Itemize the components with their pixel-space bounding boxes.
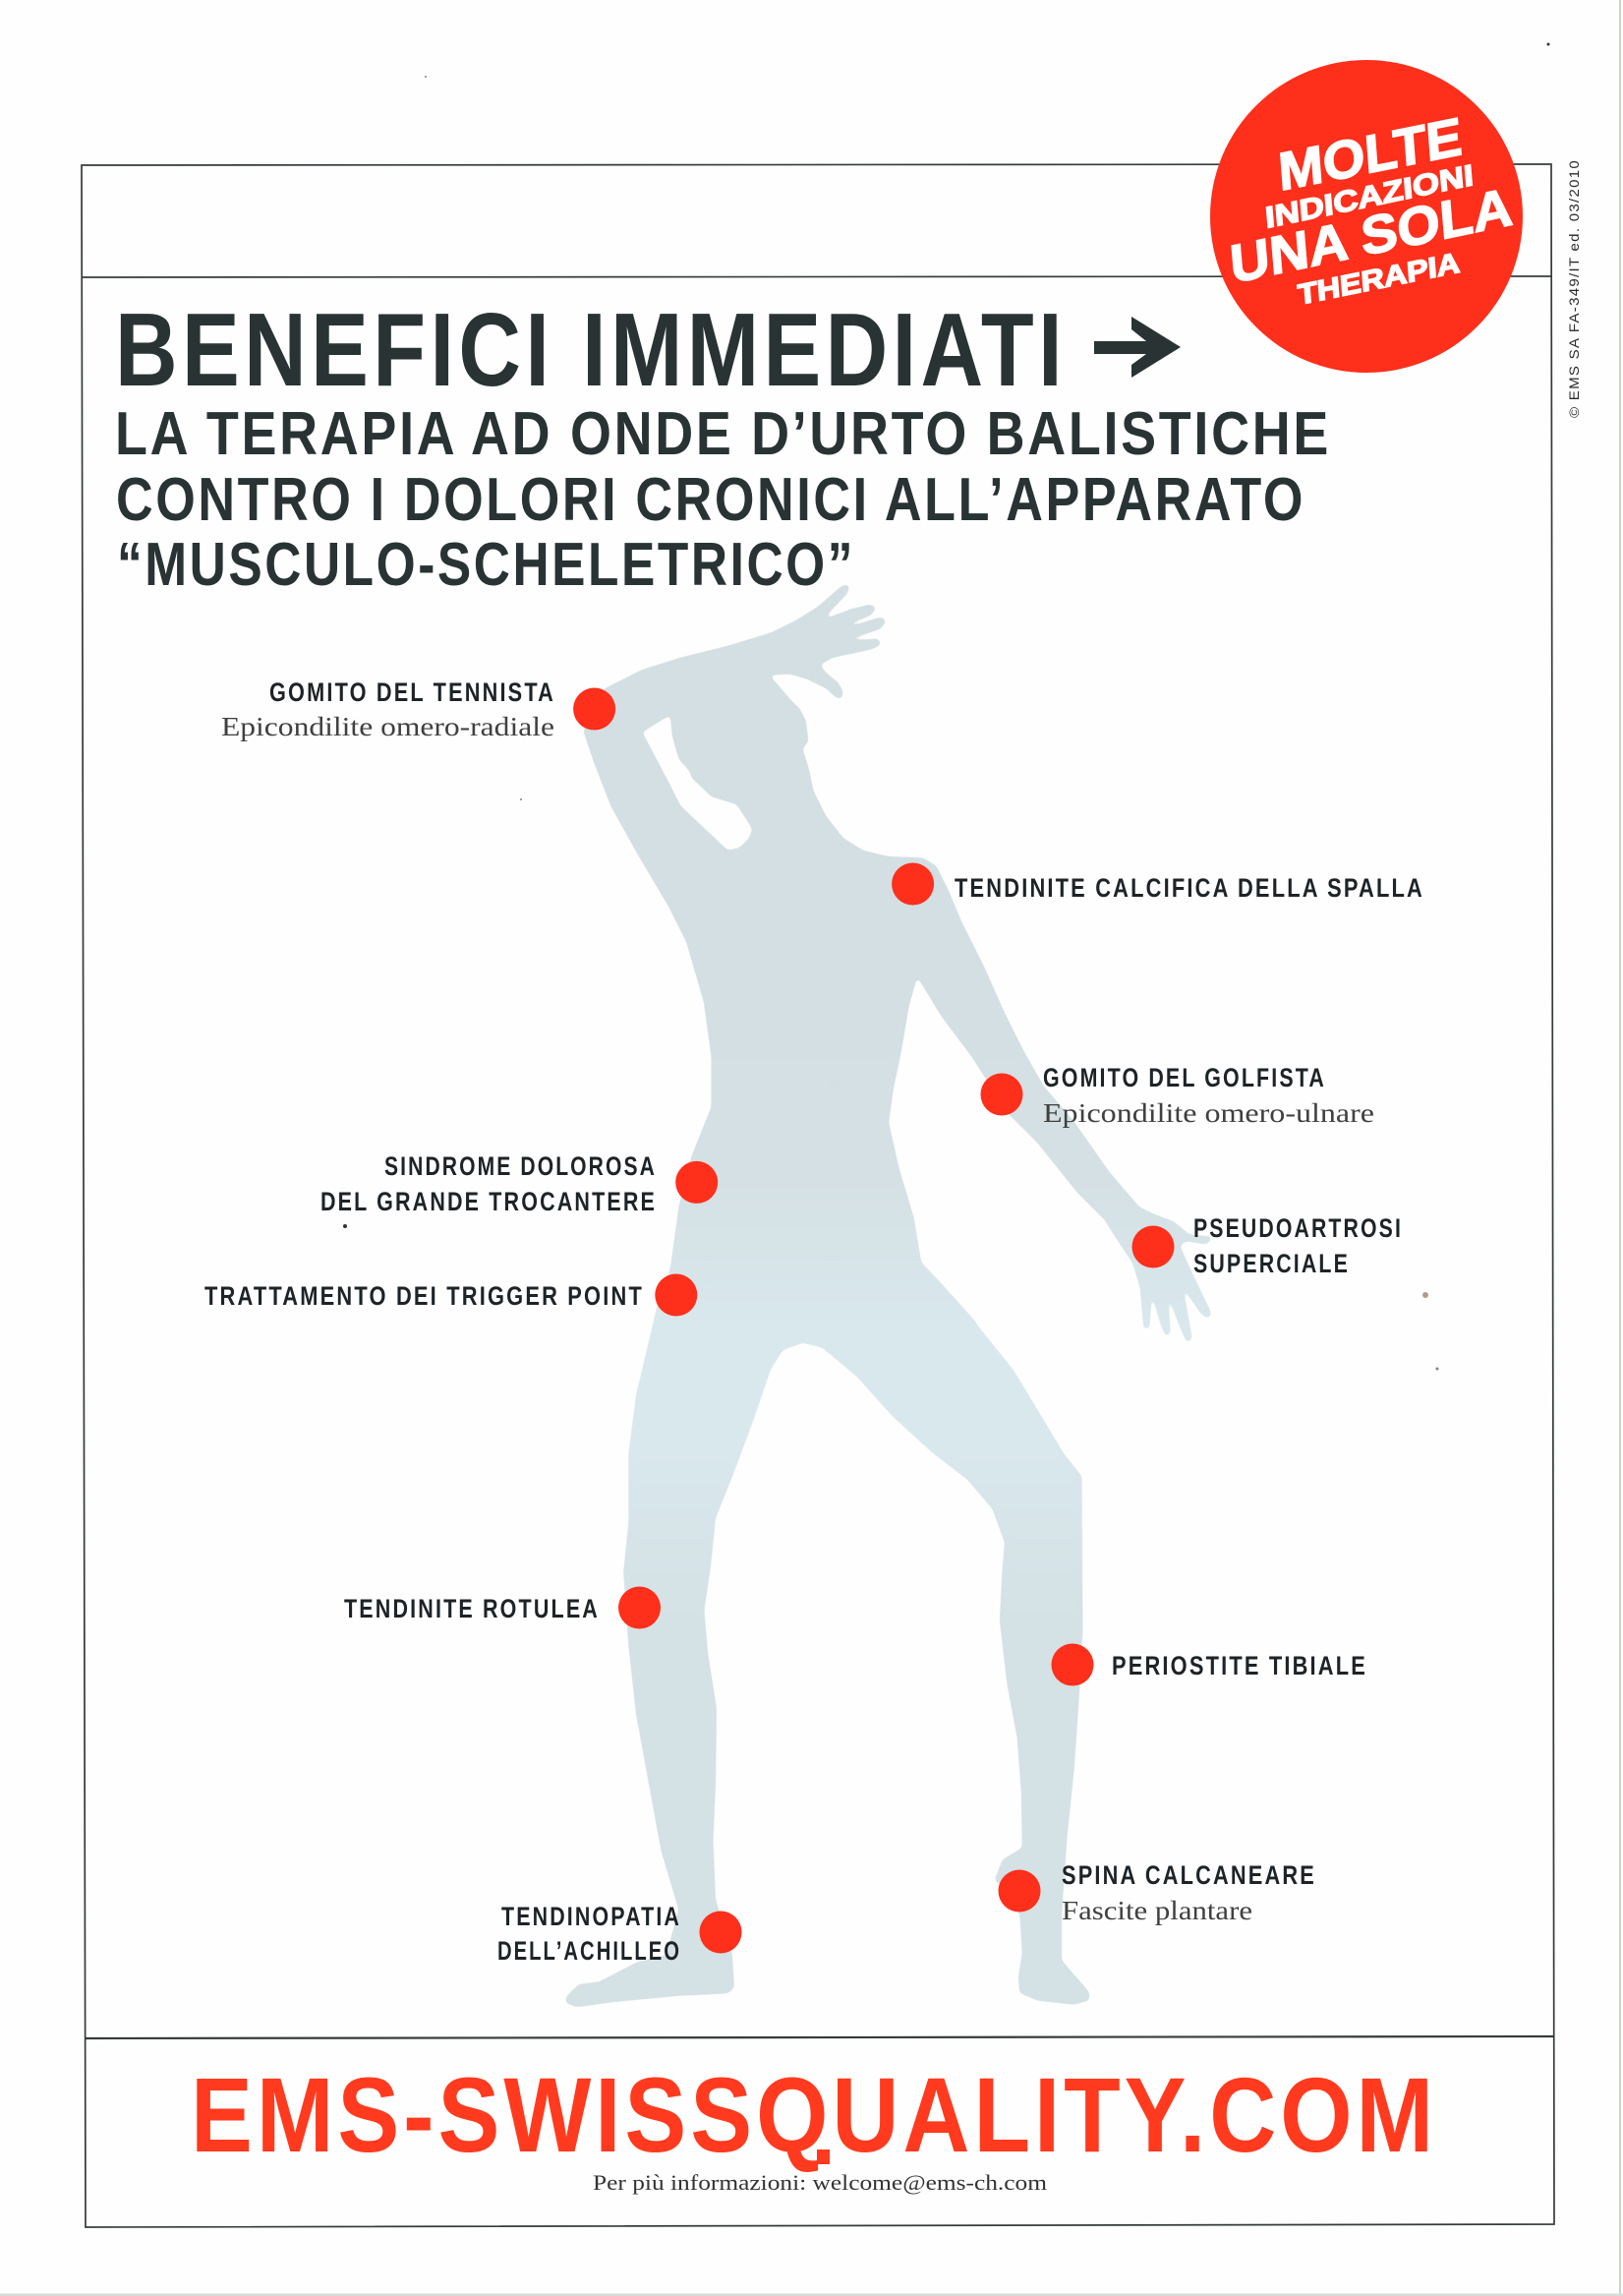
label: sindrome dolorosa: DEL GRANDE TROCANTERE <box>320 1187 657 1216</box>
label: spina calcaneare <box>1062 1860 1316 1925</box>
badge text: una sola: UNA SOLA <box>1228 177 1515 295</box>
label: pseudoartrosi: SUPERCIALE <box>1193 1249 1350 1278</box>
badge text: indicazioni: INDICAZIONI <box>1264 159 1475 235</box>
badge text: molte: MOLTE <box>1276 107 1464 203</box>
subtitle: CONTRO I DOLORI CRONICI ALL’APPARATO <box>116 466 1305 534</box>
subtitle <box>115 400 1331 599</box>
label: gomito del golfista <box>1043 1063 1374 1128</box>
title: BENEFICI IMMEDIATI <box>115 292 1067 408</box>
label: gomito del tennista: GOMITO DEL TENNISTA <box>269 677 555 707</box>
label: tendinite calcifica: TENDINITE CALCIFICA DELLA SPALLA <box>955 873 1424 903</box>
label: spina calcaneare: Fascite plantare <box>1062 1896 1252 1925</box>
label: trigger point: TRATTAMENTO DEI TRIGGER POINT <box>204 1281 644 1311</box>
label: pseudoartrosi <box>1193 1213 1403 1278</box>
label: sindrome dolorosa <box>320 1151 657 1216</box>
label: tendinopatia: TENDINOPATIA <box>501 1902 681 1931</box>
subtitle: LA TERAPIA AD ONDE D’URTO BALISTICHE <box>115 400 1331 468</box>
footer contact: Per più informazioni: welcome@ems-ch.com <box>593 2170 1047 2195</box>
label: tendinopatia <box>497 1902 681 1966</box>
label: spina calcaneare: SPINA CALCANEARE <box>1062 1860 1316 1890</box>
body silhouette <box>567 585 1211 2006</box>
marker dots <box>573 688 1174 1953</box>
badge text: therapia: THERAPIA <box>1297 247 1461 312</box>
label: gomito del golfista: Epicondilite omero-ulnare <box>1043 1098 1374 1128</box>
arrow <box>1094 317 1181 378</box>
label: tendinopatia: DELL’ACHILLEO <box>497 1936 681 1966</box>
label: sindrome dolorosa: SINDROME DOLOROSA <box>384 1151 657 1181</box>
label: gomito del tennista: Epicondilite omero-radiale <box>221 712 554 741</box>
badge: red circle <box>1210 60 1523 373</box>
footer website: EMS-SWISSQUALITY.COM <box>191 2056 1437 2174</box>
edition note: © EMS SA FA-349/IT ed. 03/2010 <box>1566 159 1582 418</box>
label: periostite tibiale: PERIOSTITE TIBIALE <box>1112 1651 1367 1680</box>
subtitle: “MUSCULO-SCHELETRICO” <box>117 531 855 599</box>
label: gomito del golfista: GOMITO DEL GOLFISTA <box>1043 1063 1326 1092</box>
label: tendinite rotulea: TENDINITE ROTULEA <box>344 1594 600 1623</box>
label: gomito del tennista <box>221 677 555 741</box>
label: pseudoartrosi: PSEUDOARTROSI <box>1193 1213 1403 1243</box>
